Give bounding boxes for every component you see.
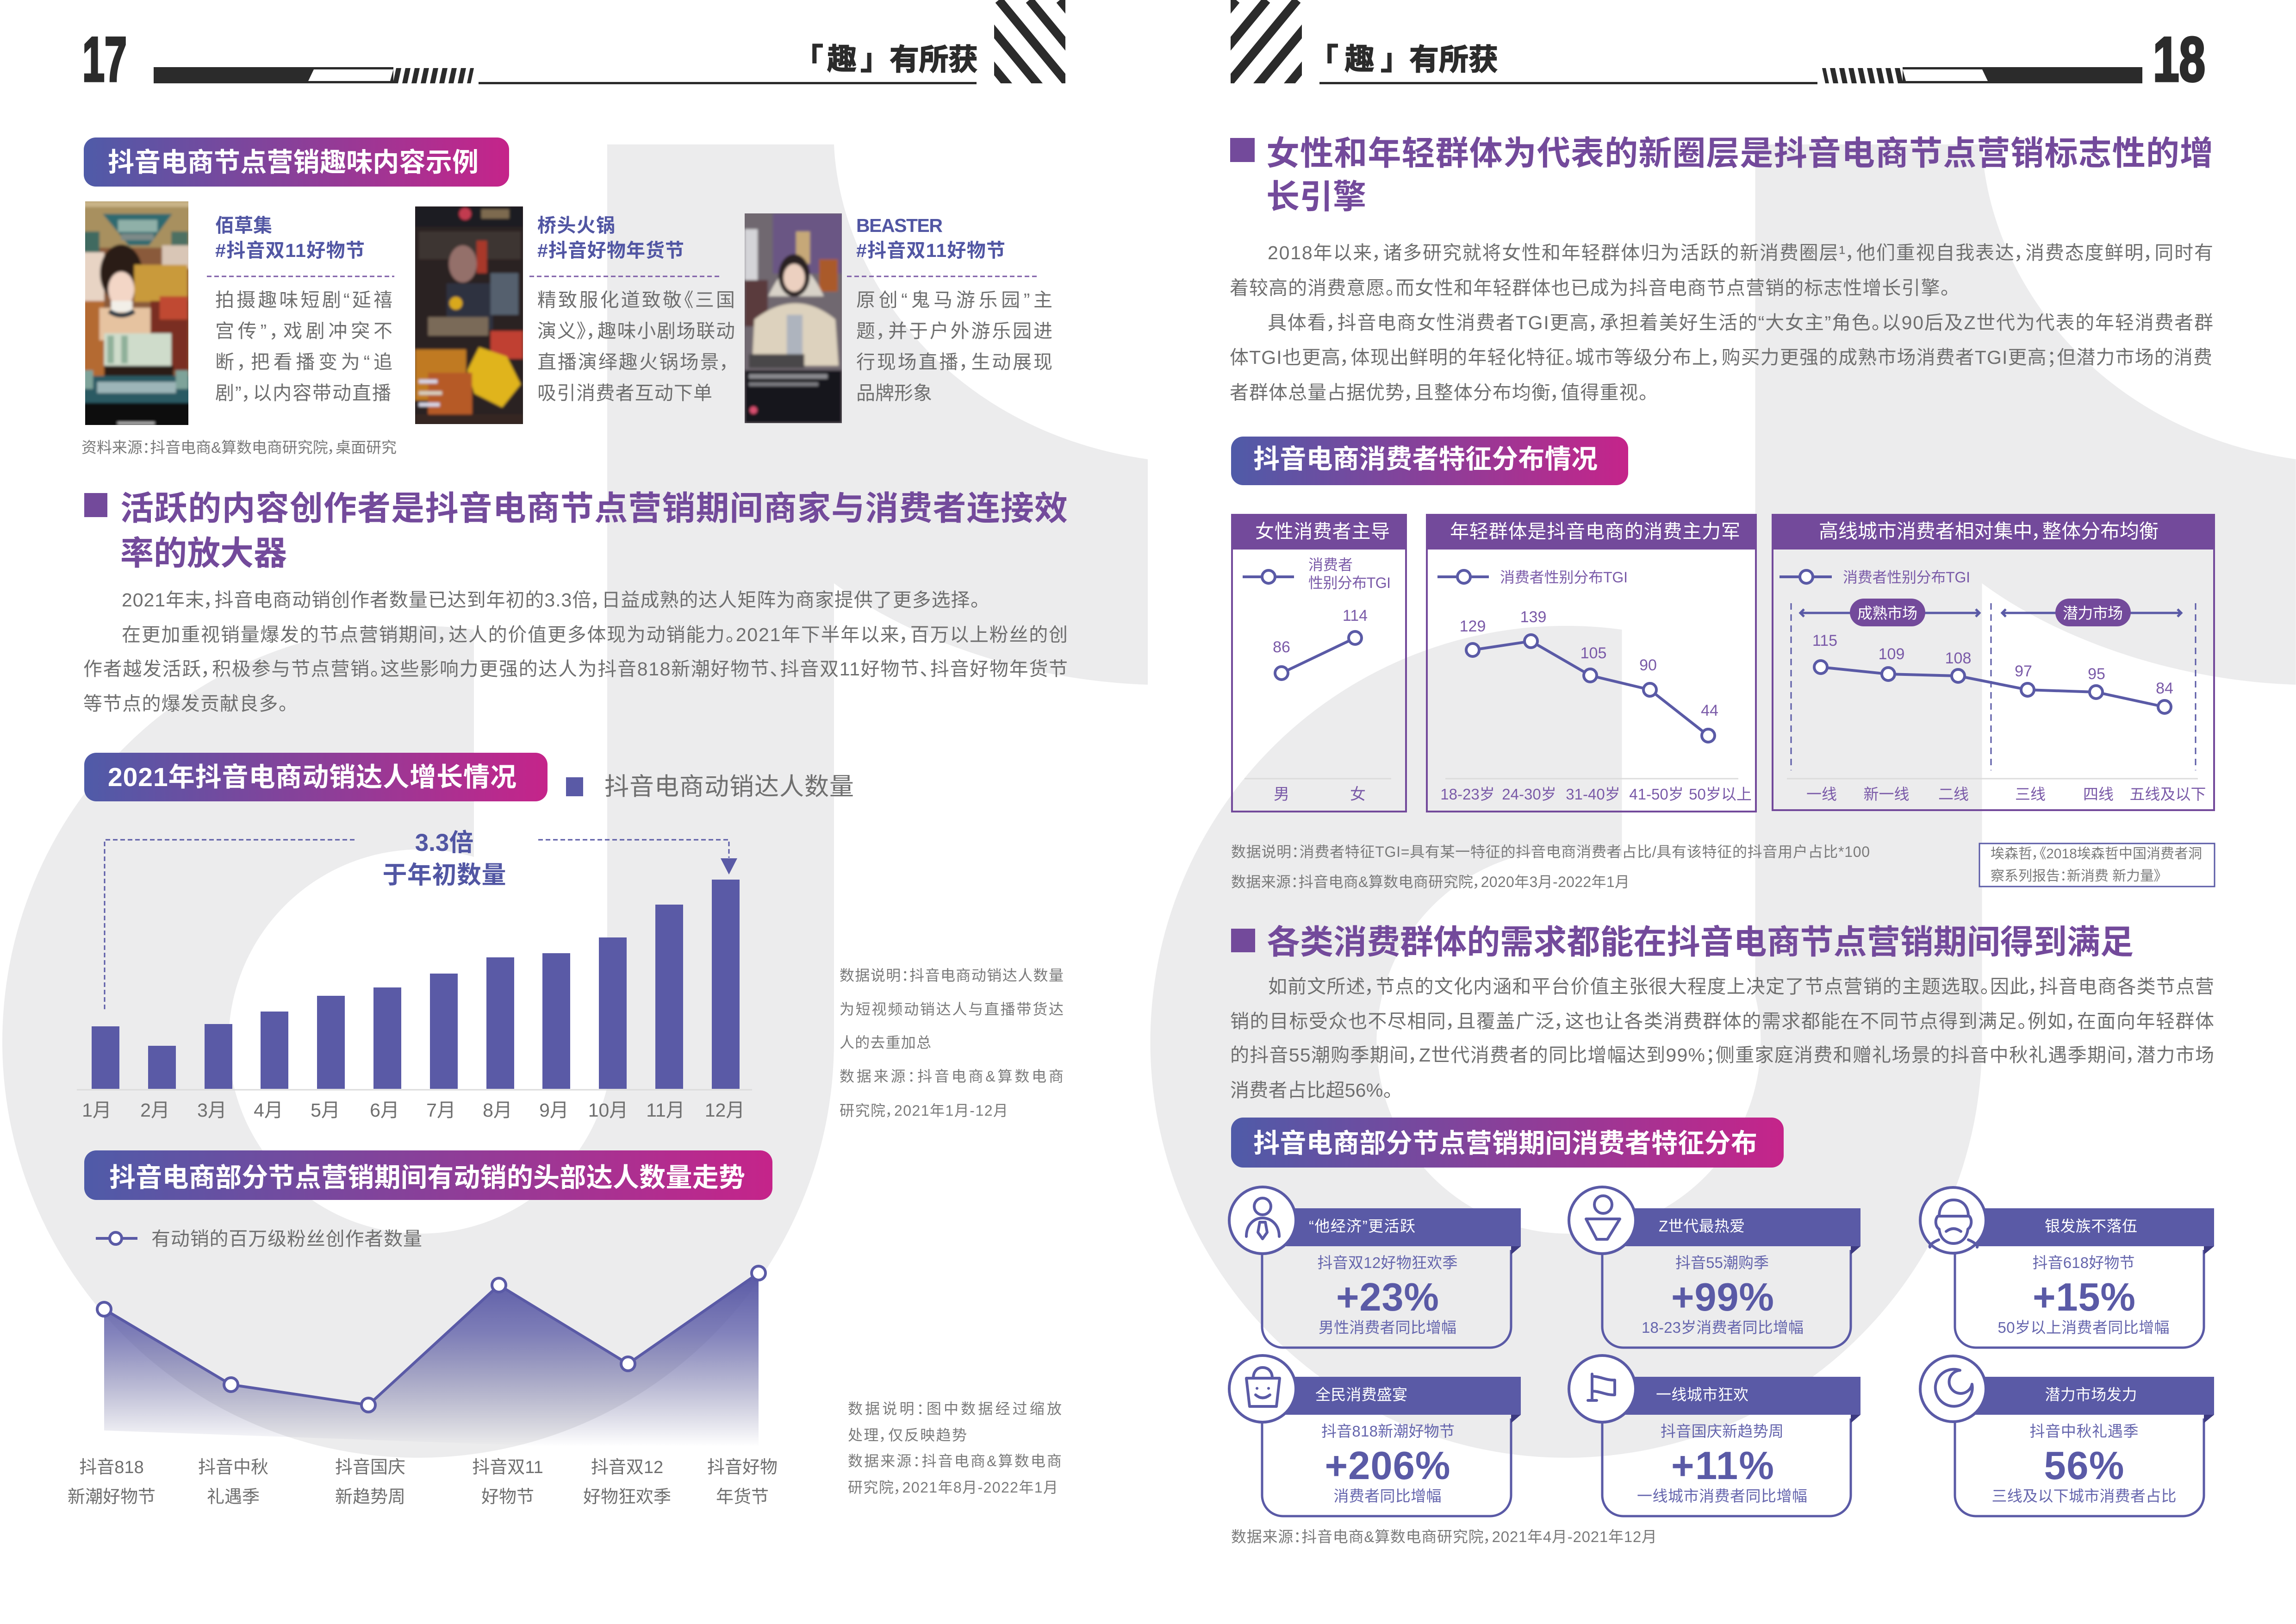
area chart: top creators trend: 抖音818: [79, 1458, 144, 1477]
area chart: top creators trend: [68, 1266, 778, 1507]
panel: city tier: 潜力市场: [2063, 605, 2123, 622]
data notes: consumer distribution: [1231, 843, 1870, 890]
body text: creators: 2021年末，抖音电商动销创作者数量已达到年初的3.3倍，日益成熟的达人矩阵为商家提供了更多选择。: [122, 589, 980, 611]
card: tier-1 cities: 抖音国庆新趋势周: [1661, 1423, 1784, 1440]
footnote box: [1979, 843, 2215, 887]
running title left: 有所获: [890, 43, 978, 76]
image: example 3 livestream screenshot: [740, 209, 846, 428]
pill heading: content examples: 抖音电商节点营销趣味内容示例: [108, 148, 479, 177]
panel: gender: 114: [1343, 607, 1368, 625]
background logo: right page: [1151, 144, 2296, 1458]
legend: bar chart: 抖音电商动销达人数量: [604, 773, 854, 800]
bar chart: monthly creators: 6月: [370, 1099, 399, 1121]
example 1 text: #抖音双11好物节: [215, 240, 365, 261]
page number 18: 18: [2153, 24, 2205, 94]
panel: city tier: 成熟市场: [1857, 605, 1917, 622]
bar chart: monthly creators: 7月: [426, 1099, 456, 1121]
body text: women and youth: 者群体总量占据优势，且整体分布均衡，值得重视。: [1230, 382, 1648, 403]
panel: age: [1426, 514, 1757, 812]
callout: 3.3x: 于年初数量: [382, 862, 506, 889]
example 3 text: 题，并于户外游乐园进: [856, 320, 1052, 342]
card: male consumers: 男性消费者同比增幅: [1319, 1319, 1456, 1336]
running title left: [808, 43, 978, 76]
area chart: top creators trend: 抖音双12: [591, 1458, 663, 1477]
card: male consumers: +23%: [1336, 1275, 1439, 1319]
card: silver generation: [1920, 1187, 2214, 1348]
panel: city tier: 新一线: [1863, 786, 1910, 803]
data notes: bar chart: 为短视频动销达人与直播带货达: [840, 1001, 1064, 1018]
pill heading: growth: [84, 753, 548, 801]
panel: city tier: 高线城市消费者相对集中，整体分布均衡: [1819, 520, 2159, 542]
body text: women and youth: 具体看，抖音电商女性消费者TGI更高，承担着美好生活的“大女主”角色。以90后及Z世代为代表的年轻消费者群: [1268, 312, 2213, 333]
example 1 text: 剧”，以内容带动直播: [215, 382, 391, 404]
section heading: women and youth: 长引擎: [1266, 179, 1366, 216]
pill heading: festival consumer features: [1231, 1118, 1784, 1168]
example 3 text: 行现场直播，生动展现: [856, 351, 1052, 373]
body text: creators: 作者越发活跃，积极参与节点营销。这些影响力更强的达人为抖音818新潮好物节、抖音双11好物节、抖音好物年货节: [83, 658, 1068, 680]
area chart: top creators trend: 抖音好物: [707, 1458, 778, 1477]
panel: age: 50岁以上: [1689, 786, 1752, 803]
panel: gender: 消费者: [1308, 556, 1353, 573]
body text: women and youth: 着较高的消费意愿。而女性和年轻群体也已成为抖音电商节点营销的标志性增长引擎。: [1230, 277, 1950, 299]
card: tier-1 cities: +11%: [1671, 1444, 1774, 1488]
bar chart: monthly creators: 10月: [588, 1099, 628, 1121]
data notes: consumer distribution: 数据说明：消费者特征TGI=具有某一特征的抖音电商消费者占比/具有该特征的抖音用户占比*100: [1231, 843, 1870, 860]
card: all consumers: [1229, 1355, 1521, 1516]
example 1 text: [207, 215, 394, 404]
panel: city tier: 109: [1879, 645, 1904, 663]
body text: women and youth: 2018年以来，诸多研究就将女性和年轻群体归为活跃的新消费圈层¹，他们重视自我表达，消费态度鲜明，同时有: [1268, 242, 2213, 263]
panel: age: 41-50岁: [1629, 786, 1684, 803]
area chart: top creators trend: 抖音双11: [472, 1458, 543, 1477]
panel: age: 105: [1580, 644, 1606, 662]
panel: age: 24-30岁: [1502, 786, 1556, 803]
pill heading: top creators: 抖音电商部分节点营销期间有动销的头部达人数量走势: [109, 1163, 745, 1193]
body text: all groups: 如前文所述，节点的文化内涵和平台价值主张很大程度上决定了节点营销的主题选取。因此，抖音电商各类节点营: [1268, 976, 2214, 997]
card: male consumers: [1229, 1187, 1521, 1348]
body text: women and youth: [1230, 242, 2213, 403]
icon: bearded man: [1930, 1200, 1977, 1247]
panel: gender: 性别分布TGI: [1308, 575, 1391, 591]
data notes: area chart: 处理，仅反映趋势: [848, 1427, 967, 1443]
pill heading: consumer distribution: 抖音电商消费者特征分布情况: [1253, 444, 1598, 474]
running title right: 有所获: [1409, 43, 1498, 76]
example 1 text: 佰草集: [215, 215, 272, 236]
body text: all groups: 销的目标受众也不尽相同，且覆盖广泛，这也让各类消费群体的需求都能在不同节点得到满足。例如，在面向年轻群体: [1230, 1011, 2214, 1032]
panel: gender: 男: [1274, 786, 1289, 803]
section heading: creators: 活跃的内容创作者是抖音电商节点营销期间商家与消费者连接效: [120, 490, 1068, 527]
area chart: top creators trend: 抖音国庆: [335, 1458, 405, 1477]
card: silver generation: 50岁以上消费者同比增幅: [1997, 1319, 2170, 1336]
panel: city tier: 四线: [2083, 786, 2114, 803]
area chart: top creators trend: 好物狂欢季: [583, 1487, 671, 1507]
bar chart: monthly creators: 4月: [254, 1099, 283, 1121]
example 2 text: 直播演绎趣火锅场景，: [537, 351, 730, 373]
example 1 text: 断，把看播变为“追: [215, 351, 392, 373]
card: gen Z: 18-23岁消费者同比增幅: [1642, 1319, 1804, 1336]
example 3 text: 品牌形象: [856, 382, 932, 404]
panel: gender: 86: [1273, 638, 1290, 656]
footnote box: 察系列报告：新消费 新力量》: [1991, 868, 2161, 884]
example 1 text: 拍摄趣味短剧“延禧: [215, 289, 392, 311]
icon: crescent moon: [1935, 1369, 1972, 1406]
body text: all groups: 的抖音55潮购季期间，Z世代消费者的同比增幅达到99%；侧重家庭消费和赠礼场景的抖音中秋礼遇季期间，潜力市场: [1230, 1044, 2214, 1066]
card: all consumers: 抖音818新潮好物节: [1321, 1423, 1455, 1440]
example 3 text: 原创“鬼马游乐园”主: [856, 289, 1052, 311]
example 2 text: 演义》，趣味小剧场联动: [537, 320, 735, 342]
pill heading: festival consumer features: 抖音电商部分节点营销期间消费者特征分布: [1253, 1129, 1757, 1158]
background logo: left page: [2, 144, 1148, 1458]
data notes: consumer distribution: 数据来源：抖音电商&算数电商研究院，2020年3月-2022年1月: [1231, 874, 1630, 890]
card: gen Z: +99%: [1671, 1275, 1774, 1319]
running title right: 「趣」: [1323, 43, 1396, 76]
data notes: area chart: 研究院，2021年8月-2022年1月: [848, 1479, 1058, 1496]
body text: creators: 等节点的爆发贡献良多。: [83, 693, 288, 714]
panel: age: 消费者性别分布TGI: [1500, 569, 1628, 586]
area chart: top creators trend: 好物节: [481, 1487, 534, 1507]
data notes: area chart: 数据来源：抖音电商&算数电商: [848, 1453, 1062, 1469]
icon: person with tie: [1246, 1198, 1279, 1239]
body text: all groups: 消费者占比超56%。: [1230, 1080, 1393, 1101]
section heading: all groups: 各类消费群体的需求都能在抖音电商节点营销期间得到满足: [1267, 924, 2134, 961]
data notes: bar chart: 研究院，2021年1月-12月: [840, 1102, 1008, 1119]
card: gen Z: 抖音55潮购季: [1675, 1254, 1769, 1271]
data notes: bar chart: 数据说明：抖音电商动销达人数量: [840, 967, 1064, 984]
panel: city tier: 五线及以下: [2130, 786, 2206, 803]
running title left: 「趣」: [808, 43, 876, 76]
example 2 text: 精致服化道致敬《三国: [537, 289, 735, 311]
example 3 text: BEASTER: [856, 215, 943, 236]
card: silver generation: +15%: [2033, 1275, 2135, 1319]
panel: gender: 女: [1350, 786, 1366, 803]
panel: age: 年轻群体是抖音电商的消费主力军: [1450, 521, 1740, 542]
body text: women and youth: 体TGI也更高，体现出鲜明的年轻化特征。城市等级分布上，购买力更强的成熟市场消费者TGI更高；但潜力市场的消费: [1230, 347, 2212, 368]
source note: 资料来源：抖音电商&算数电商研究院，桌面研究: [81, 439, 397, 456]
body text: creators: 在更加重视销量爆发的节点营销期间，达人的价值更多体现为动销能力。2021年下半年以来，百万以上粉丝的创: [122, 624, 1068, 645]
panel: age: 139: [1520, 608, 1546, 626]
source note: cards: 数据来源：抖音电商&算数电商研究院，2021年4月-2021年12月: [1231, 1528, 1657, 1545]
area chart: top creators trend: 抖音中秋: [198, 1458, 268, 1477]
icon: smiling bag: [1246, 1368, 1280, 1406]
pill heading: content examples: [84, 137, 509, 187]
panel: city tier: 消费者性别分布TGI: [1843, 569, 1970, 586]
card: potential markets: [1920, 1356, 2214, 1516]
data notes: bar chart: 人的去重加总: [840, 1034, 931, 1051]
example 1 text: 宫传”，戏剧冲突不: [215, 320, 392, 342]
running title right: [1323, 43, 1498, 76]
panel: gender: [1231, 514, 1407, 812]
panel: city tier: 三线: [2015, 786, 2046, 803]
card: silver generation: 银发族不落伍: [2045, 1218, 2137, 1235]
image: example 2 livestream screenshot: [411, 202, 528, 429]
data notes: area chart: [848, 1400, 1062, 1496]
bar chart: monthly creators: 12月: [705, 1099, 745, 1121]
example 2 text: [529, 215, 735, 404]
panel: age: 44: [1701, 702, 1718, 719]
example 3 text: [847, 215, 1052, 404]
bar chart: monthly creators: 3月: [197, 1099, 227, 1121]
pill heading: top creators: [84, 1150, 772, 1200]
panel: city tier: 97: [2015, 662, 2032, 680]
header decoration: right page: [1148, 0, 2142, 106]
page number 17: 17: [82, 24, 127, 94]
card: tier-1 cities: 一线城市狂欢: [1656, 1386, 1748, 1403]
bar chart: monthly creators: 2月: [140, 1099, 170, 1121]
area chart: top creators trend: 礼遇季: [207, 1487, 260, 1507]
bar chart: monthly creators: [77, 880, 752, 1121]
panel: city tier: 115: [1812, 632, 1837, 650]
header decoration: left page: [154, 0, 1148, 106]
panel: city tier: 95: [2088, 665, 2105, 683]
icon: female symbol: [1586, 1196, 1620, 1239]
card: potential markets: 三线及以下城市消费者占比: [1992, 1487, 2176, 1505]
image: example 1 livestream screenshot: [85, 201, 188, 425]
card: gen Z: Z世代最热爱: [1659, 1218, 1745, 1235]
panel: city tier: 一线: [1806, 786, 1837, 803]
panel: age: 31-40岁: [1566, 786, 1620, 803]
panel: city tier: 84: [2156, 680, 2173, 697]
panel: age: 90: [1639, 656, 1657, 674]
example 2 text: 桥头火锅: [537, 215, 615, 236]
data notes: area chart: 数据说明：图中数据经过缩放: [848, 1400, 1062, 1417]
card: all consumers: 消费者同比增幅: [1334, 1487, 1441, 1505]
pill heading: consumer distribution: [1231, 437, 1628, 485]
callout: 3.3x: 3.3倍: [415, 829, 473, 856]
bar chart: monthly creators: 8月: [483, 1099, 512, 1121]
example 2 text: 吸引消费者互动下单: [537, 382, 712, 404]
section heading: creators: [84, 490, 1068, 572]
section heading: creators: 率的放大器: [120, 535, 287, 572]
bar chart: monthly creators: 5月: [311, 1099, 340, 1121]
footnote box: 埃森哲，《2018埃森哲中国消费者洞: [1991, 846, 2202, 862]
pill heading: growth: 2021年抖音电商动销达人增长情况: [108, 762, 516, 792]
card: tier-1 cities: [1569, 1355, 1860, 1516]
card: potential markets: 潜力市场发力: [2045, 1386, 2137, 1403]
legend: area chart: 有动销的百万级粉丝创作者数量: [151, 1228, 422, 1249]
example 3 text: #抖音双11好物节: [856, 240, 1005, 261]
card: silver generation: 抖音618好物节: [2033, 1254, 2134, 1271]
card: all consumers: 全民消费盛宴: [1315, 1386, 1407, 1403]
bar chart: monthly creators: 1月: [82, 1099, 112, 1121]
card: gen Z: [1569, 1187, 1860, 1348]
area chart: top creators trend: 新趋势周: [335, 1487, 405, 1507]
panel: city tier: 108: [1945, 650, 1971, 667]
section heading: women and youth: 女性和年轻群体为代表的新圈层是抖音电商节点营销标志性的增: [1266, 135, 2213, 172]
data notes: bar chart: 数据来源：抖音电商&算数电商: [840, 1068, 1064, 1085]
panel: gender: 女性消费者主导: [1255, 521, 1390, 542]
card: all consumers: +206%: [1325, 1444, 1450, 1488]
panel: city tier: 二线: [1938, 786, 1969, 803]
card: potential markets: 抖音中秋礼遇季: [2030, 1423, 2138, 1440]
panel: age: 18-23岁: [1440, 786, 1495, 803]
card: male consumers: 抖音双12好物狂欢季: [1317, 1254, 1458, 1271]
panel: age: 129: [1460, 618, 1486, 635]
card: potential markets: 56%: [2044, 1444, 2124, 1488]
bar chart: monthly creators: 9月: [539, 1099, 569, 1121]
section heading: women and youth: [1230, 135, 2213, 216]
example 2 text: #抖音好物年货节: [537, 240, 684, 261]
panel: city tier: [1772, 514, 2215, 810]
body text: creators: [83, 589, 1068, 714]
body text: all groups: [1230, 976, 2214, 1101]
card: tier-1 cities: 一线城市消费者同比增幅: [1637, 1487, 1807, 1505]
card: male consumers: “他经济”更活跃: [1309, 1218, 1415, 1235]
icon: flag: [1588, 1374, 1615, 1400]
area chart: top creators trend: 年货节: [716, 1487, 769, 1507]
data notes: bar chart: [840, 967, 1064, 1119]
bar chart: monthly creators: 11月: [646, 1099, 685, 1121]
area chart: top creators trend: 新潮好物节: [68, 1487, 156, 1507]
callout: 3.3x: [105, 829, 737, 1009]
